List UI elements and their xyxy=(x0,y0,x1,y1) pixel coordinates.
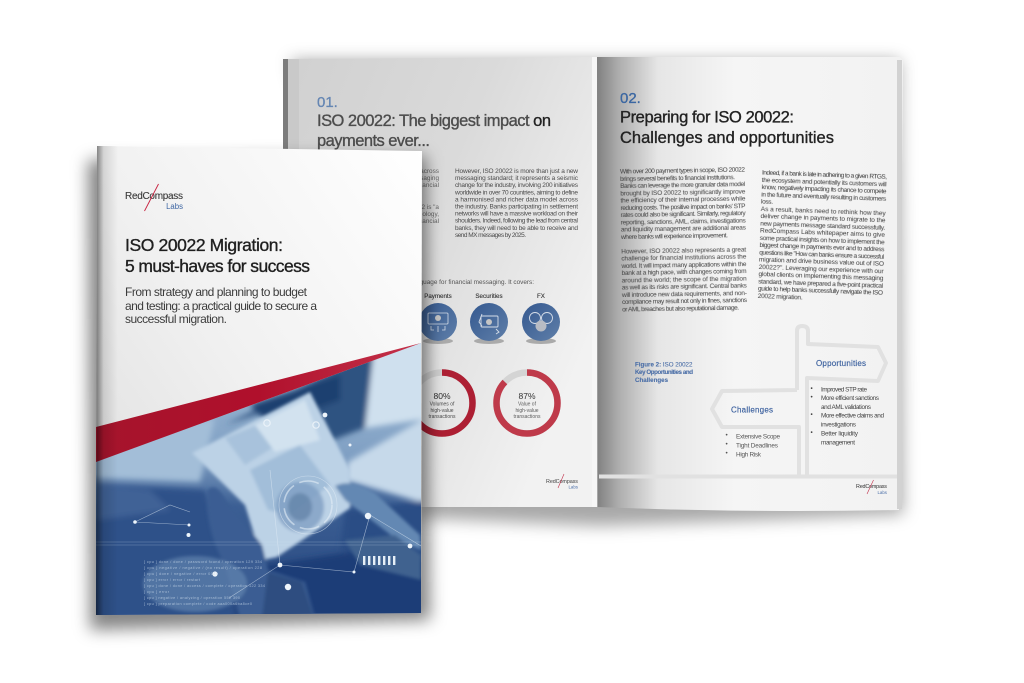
text: left column fragments: across xyxy=(420,168,439,175)
terminal log text: [ cpu ] error / error / restart xyxy=(144,578,201,582)
list: challenges xyxy=(726,432,780,458)
heading: preparing: Preparing for ISO 20022: xyxy=(620,108,794,126)
terminal log text: [ cpu ] negative / analyzing / operation 552 390 xyxy=(144,596,240,600)
donut chart: 80 percent: high-value xyxy=(430,408,454,414)
text: right column: banks, they will need to be able to receive and xyxy=(455,225,578,232)
text: first column: compliance may result not only in fines, sanctions xyxy=(622,297,748,306)
text: first column: and liquidity management are additional areas xyxy=(621,225,747,234)
list: opportunities: More efficient sanctions xyxy=(821,395,879,402)
text: second column: standard, we have prepared a five-point practical xyxy=(758,278,884,290)
text: first column: challenge for financial institutions across the xyxy=(621,254,747,263)
cover shadow xyxy=(88,156,430,630)
text: second column: new payments message standard successfully. xyxy=(760,220,885,232)
text: left column fragments: nancial xyxy=(419,182,439,189)
text: first column: However, ISO 20022 also represents a great xyxy=(621,246,746,255)
brochure mockup scene xyxy=(76,50,913,641)
text: right column: networks will have a massive workload on their xyxy=(455,211,579,218)
list: challenges: • xyxy=(726,450,728,457)
donut chart: 87 percent xyxy=(496,372,558,434)
donut chart: 80 percent: 80% xyxy=(433,391,451,401)
text: first column: as well as its risks are significant. Central banks xyxy=(622,283,748,292)
open spread shadow xyxy=(290,60,903,526)
text: first column: Banks can leverage the more granular data model xyxy=(620,181,746,190)
logo: cover xyxy=(125,184,183,211)
heading: biggest impact: ISO 20022: The biggest impact on xyxy=(317,112,551,130)
terminal log text: [ cpu ] done / done / password found / operation 129 334 xyxy=(144,560,262,564)
panel: left page of open spread xyxy=(283,57,597,507)
list: opportunities: management xyxy=(821,440,855,446)
section number 01: 01. xyxy=(317,94,338,111)
list: challenges: High Risk xyxy=(736,452,762,458)
text: first column: world. It will impact many applications within the xyxy=(620,261,747,270)
signpost diagram xyxy=(599,326,897,476)
list: opportunities: More effective claims and xyxy=(821,412,884,420)
text: first column: reducing costs. The positive impact on banks' STP xyxy=(620,203,746,212)
text: second column: 20022?". Leveraging our experience with our xyxy=(759,264,885,275)
icon row: payments securities FX: Payments xyxy=(424,293,452,300)
text: first column: around the world; the scope of the migration xyxy=(622,275,747,284)
list: opportunities: and AML validations xyxy=(821,404,871,411)
logo: left page: RedCompass xyxy=(546,479,578,485)
terminal log text: [ cpu ] negative / negative / (no result) / operation 228 xyxy=(144,566,262,570)
red diagonal band xyxy=(96,343,421,462)
text: second column xyxy=(758,170,888,304)
list: challenges: Tight Deadlines xyxy=(736,442,778,450)
icon: securities xyxy=(470,303,508,341)
text: right column: send MX messages by 2025. xyxy=(455,232,526,239)
spine shading xyxy=(96,146,118,615)
text: first column: reporting, sanctions, AML, claims, investigations xyxy=(621,217,747,226)
donut chart: 80 percent xyxy=(412,372,472,434)
list: opportunities: • xyxy=(810,394,813,401)
list: challenges: • xyxy=(726,432,728,439)
text: right column: messaging standard; it represents a seismic xyxy=(455,175,579,182)
text: first column: With over 200 payment types in scope, ISO 20022 xyxy=(620,167,745,175)
text: left column fragments: ssaging xyxy=(417,175,439,182)
text: first column xyxy=(619,167,748,313)
cover photo: hands holding a transparent tablet xyxy=(96,330,430,620)
text: second column: the ecosystem and potentially its customers will xyxy=(762,177,887,188)
logo: cover: Labs xyxy=(166,202,183,211)
sign label: challenges: Challenges xyxy=(731,406,773,414)
cover title xyxy=(125,235,310,276)
heading: preparing: Challenges and opportunities xyxy=(620,129,834,147)
cover subtitle: successful migration. xyxy=(125,312,227,326)
text: left column fragments: nancial xyxy=(419,218,439,225)
logo: cover: RedCompass xyxy=(125,191,183,202)
text: right column xyxy=(454,168,579,239)
heading: preparing xyxy=(620,108,834,147)
heading: biggest impact: payments ever... xyxy=(317,132,430,150)
sign label: opportunities: Opportunities xyxy=(816,359,866,368)
text: second column: RedCompass Labs whitepaper aims to give xyxy=(760,228,885,239)
list: opportunities: • xyxy=(810,412,813,418)
terminal log text: [ cpu ] done / done / access / complete / operation 122 334 xyxy=(144,584,265,588)
cover subtitle: and testing: a practical guide to secure a xyxy=(125,299,317,313)
terminal log text: [ cpu ] done / negative / error 0029 xyxy=(144,572,218,576)
icon: payments xyxy=(419,303,457,341)
text: left column fragments: ology, xyxy=(422,211,439,218)
terminal log text xyxy=(144,560,265,606)
text: first column: brings several benefits to financial institutions. xyxy=(620,174,735,183)
terminal log text: [ cpu ] preparation complete / code aaa000a6ba8ce0 xyxy=(144,602,252,606)
text: first column: or AML breaches but also reputational damage. xyxy=(622,305,739,313)
text: second column: biggest change in payments ever and to address xyxy=(759,242,885,253)
donut chart: 80 percent: Volumes of xyxy=(430,402,455,408)
logo: left page xyxy=(546,474,579,490)
text: second column: loss. xyxy=(761,198,773,206)
cover subtitle: From strategy and planning to budget xyxy=(125,285,308,299)
logo: right page xyxy=(856,480,888,495)
list: challenges: • xyxy=(726,441,728,448)
figure caption xyxy=(635,362,693,384)
text: second column: Indeed, if a bank is late in adhering to a given RTGS, xyxy=(762,170,887,181)
icon row: payments securities FX: Securities xyxy=(475,293,503,300)
donut chart: 87 percent: Value of xyxy=(518,402,537,408)
icon: FX coins xyxy=(522,303,560,341)
donut chart: 87 percent: transactions xyxy=(514,414,541,420)
logo: left page: Labs xyxy=(568,484,579,490)
text: second column: questions like "How can banks ensure a successful xyxy=(759,249,885,261)
text: first column: the efficiency of their internal processes while xyxy=(620,196,746,204)
text: right column: a harmonised and richer data model across xyxy=(455,196,579,203)
figure caption: Figure 2: ISO 20022 xyxy=(635,362,693,368)
text: left column fragments xyxy=(417,168,439,225)
icon: row of people xyxy=(363,556,395,565)
text: intro to coverage: universal language for financial messaging. It covers: xyxy=(384,279,534,286)
cover title: ISO 20022 Migration: xyxy=(125,235,283,255)
text: second column: know, negatively impacting its chance to compete xyxy=(761,184,887,195)
text: first column: bank at a high pace, with changes coming from xyxy=(622,268,747,277)
text: right column: worldwide in over 70 countries, aiming to define xyxy=(454,189,578,196)
text: first column: brought by ISO 20022 to significantly improve xyxy=(620,188,746,197)
section number 02: 02. xyxy=(620,90,641,107)
text: first column: where banks will experience improvement. xyxy=(620,232,728,241)
donut chart: 87 percent: high-value xyxy=(515,408,539,414)
panel: right page of open spread xyxy=(597,57,903,511)
text: second column: in the future and eventually resulting in customers xyxy=(761,191,887,203)
text: right column: change for the industry, involving 200 initiatives xyxy=(455,182,579,189)
list: opportunities: Improved STP rate xyxy=(821,386,867,394)
figure caption: Key Opportunities and xyxy=(635,369,693,376)
text: left column fragments: 22 is "a xyxy=(418,204,439,211)
text: second column: some practical insights on how to implement the xyxy=(760,235,885,246)
text: second column: global clients on implementing this messaging xyxy=(758,271,884,282)
text: right column: the industry. Banks participating in settlement xyxy=(455,204,578,210)
panel: front cover xyxy=(96,146,430,620)
logo: right page: RedCompass xyxy=(856,484,887,490)
list: challenges: Extensive Scope xyxy=(736,434,780,440)
icon row: payments securities FX: FX xyxy=(537,293,545,300)
logo: right page: Labs xyxy=(877,490,888,495)
text: second column: guide to help banks successfully navigate the ISO xyxy=(758,286,883,297)
heading: biggest impact xyxy=(317,112,551,150)
cover subtitle xyxy=(125,285,317,326)
cover title: 5 must-haves for success xyxy=(125,256,310,276)
donut chart: 80 percent: transactions xyxy=(429,414,456,420)
list: opportunities: investigations xyxy=(821,422,856,428)
list: opportunities: • xyxy=(810,386,813,392)
figure caption: Challenges xyxy=(635,377,669,384)
text: right column: However, ISO 20022 is more than just a new xyxy=(455,168,578,175)
icon row: payments securities FX xyxy=(419,293,560,344)
list: opportunities xyxy=(810,386,884,446)
list: opportunities: • xyxy=(810,430,813,436)
text: second column: deliver change in payments to migrate to the xyxy=(760,213,886,224)
text: second column: 20022 migration. xyxy=(758,293,803,301)
text: right column: shoulders. Indeed, following the lead from central xyxy=(455,218,579,225)
donut chart: 87 percent: 87% xyxy=(518,391,536,401)
text: first column: will introduce new data requirements, and non- xyxy=(621,290,747,299)
text: second column: As a result, banks need to rethink how they xyxy=(761,206,887,217)
text: second column: migration and drive business value out of ISO xyxy=(759,257,884,268)
text: first column: rates could also be significant. Similarly, regulatory xyxy=(621,210,746,219)
terminal log text: [ cpu ] error xyxy=(144,590,170,594)
list: opportunities: Better liquidity xyxy=(821,430,859,438)
